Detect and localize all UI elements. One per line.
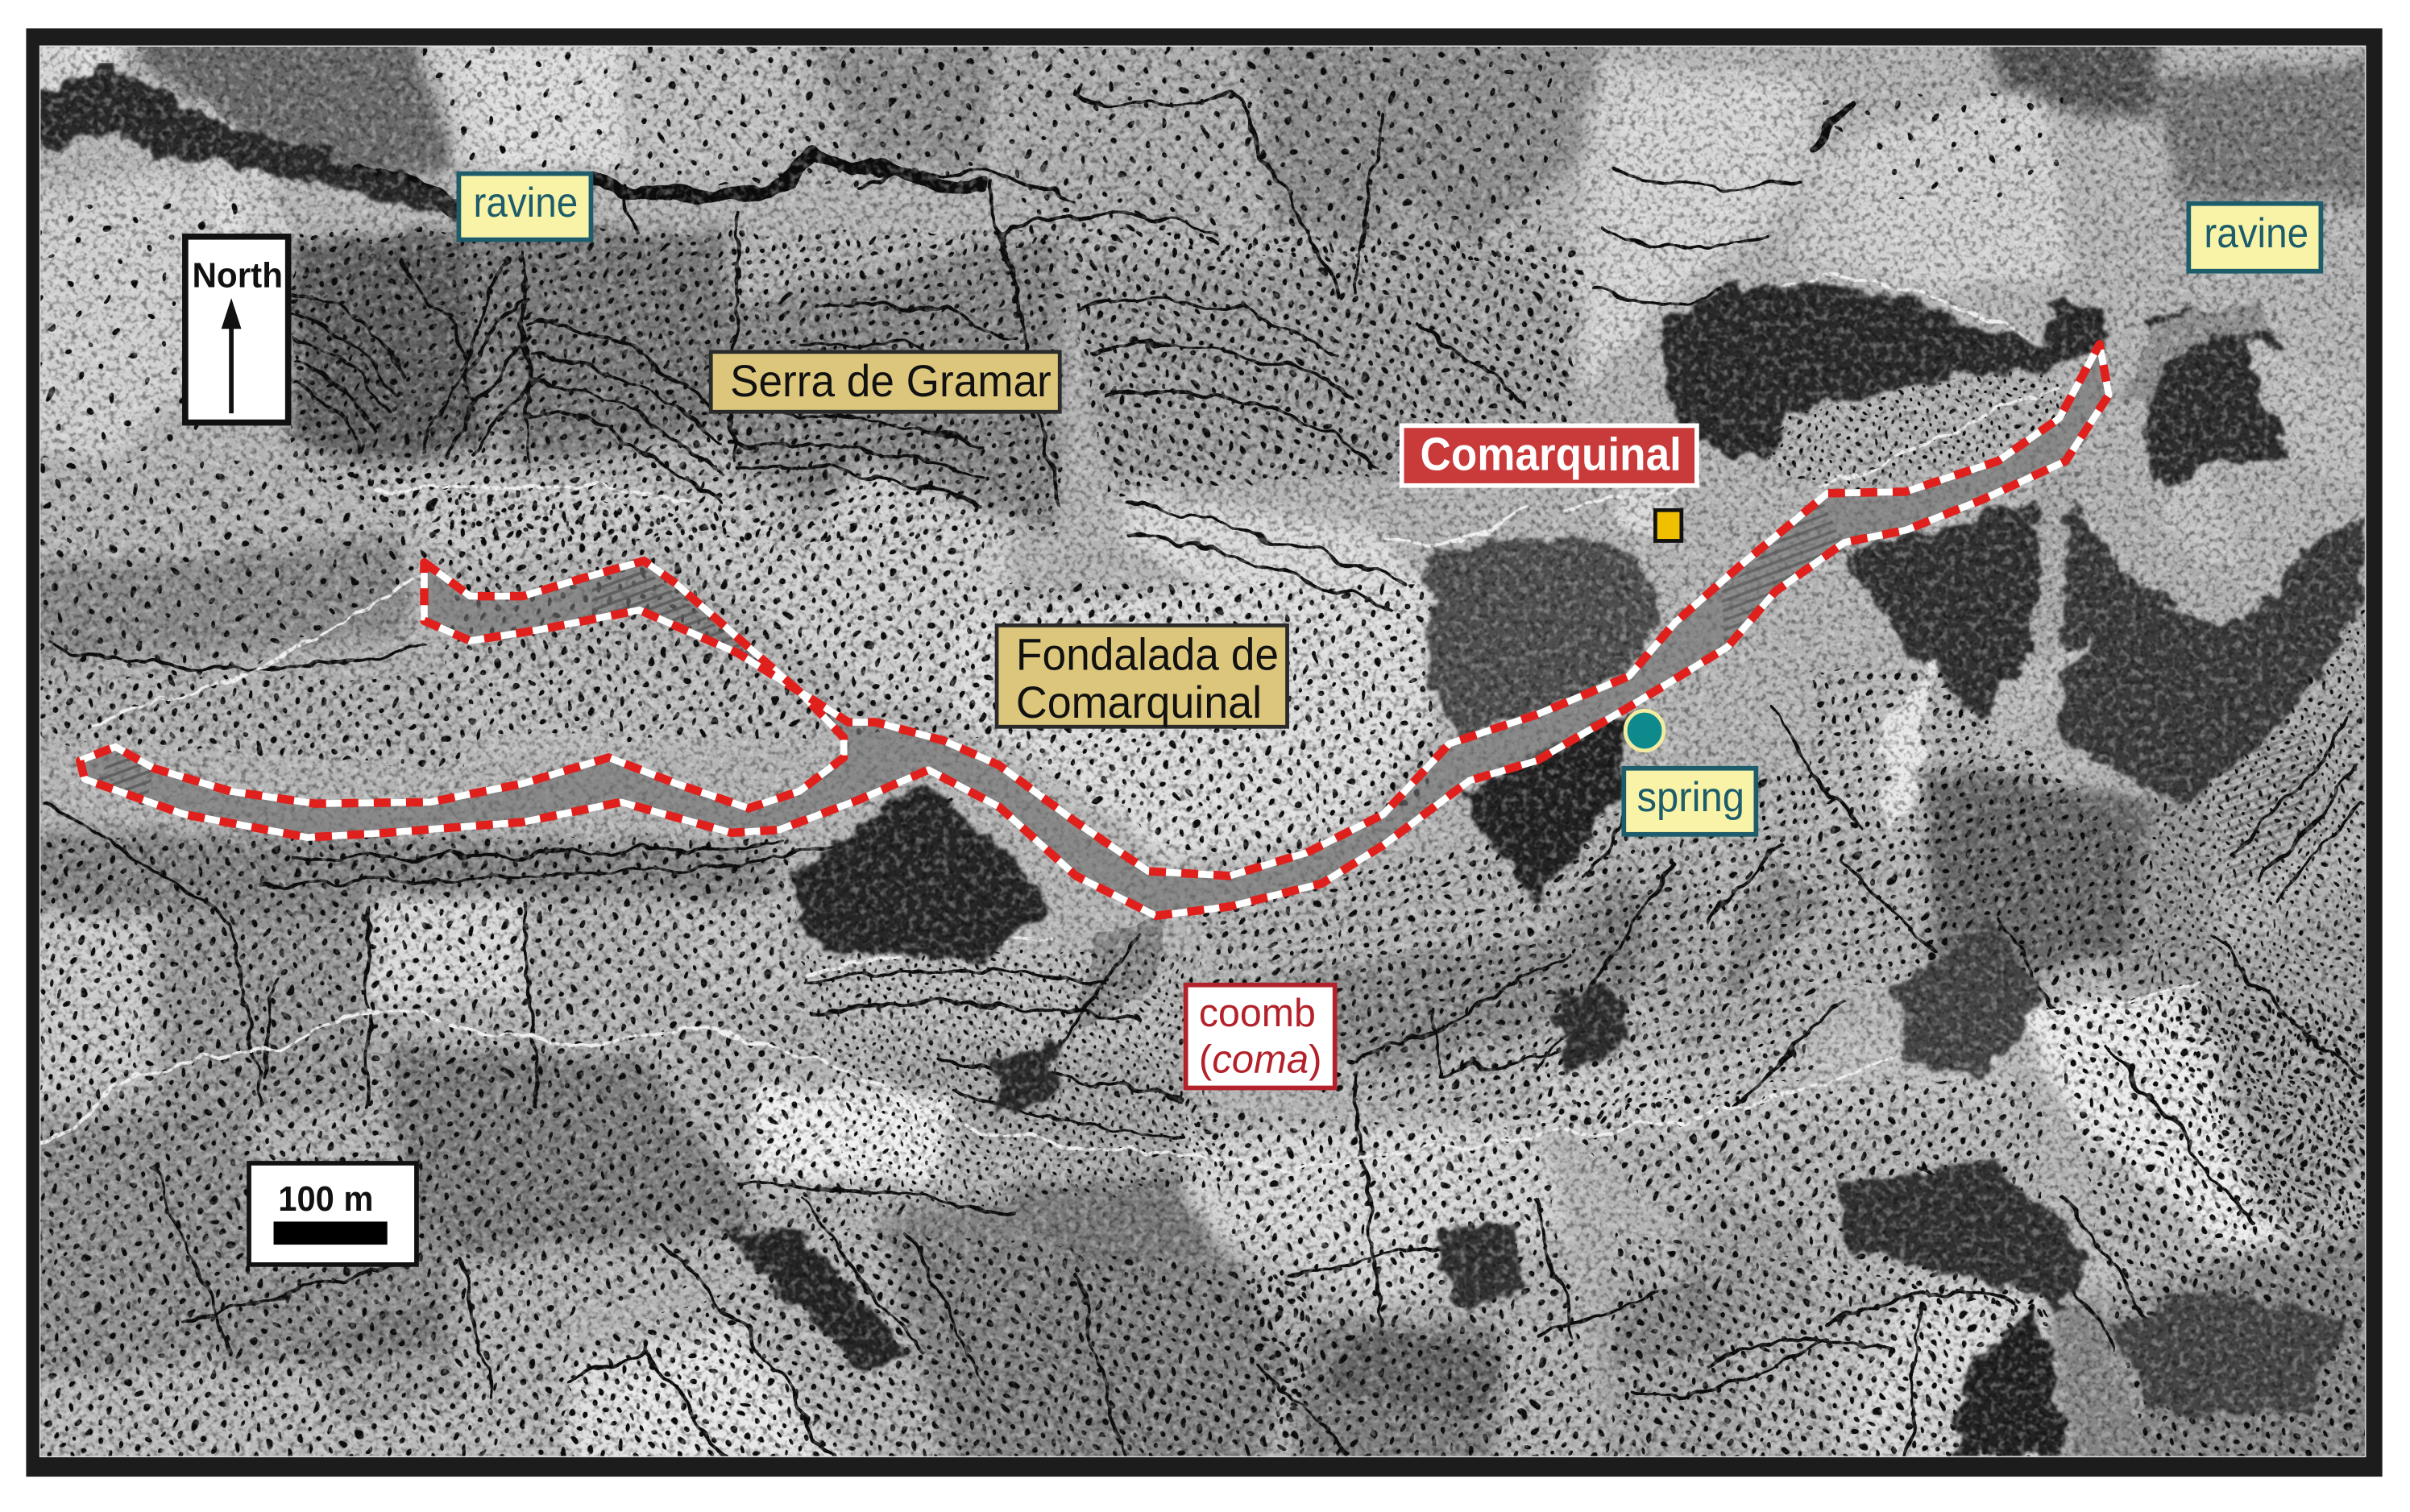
hatched terrace strips (92, 501, 2321, 906)
north arrow: North (192, 256, 283, 296)
label: coomb (coma): coomb (1199, 990, 1316, 1035)
scale bar: 100 m (278, 1179, 374, 1219)
label: coomb (coma): (coma) (1199, 1036, 1321, 1081)
label: coomb (coma) (1186, 985, 1335, 1088)
label: ravine west: ravine (474, 179, 578, 226)
icon: spring marker (1625, 710, 1664, 751)
pale tracks (40, 276, 2198, 1168)
label: ravine west (458, 174, 591, 240)
icon: yellow square settlement marker (1655, 510, 1682, 541)
woodland clearings (1614, 300, 2366, 830)
label: Comarquinal: Comarquinal (1421, 429, 1682, 481)
study corridor fill (80, 344, 2109, 916)
study corridor dashed boundary (80, 344, 2109, 916)
label: ravine east (2188, 204, 2321, 271)
scale bar (249, 1163, 417, 1265)
label: Serra de Gramar: Serra de Gramar (730, 356, 1052, 406)
label: spring: spring (1637, 773, 1744, 820)
label: Fondalada de Comarquinal (997, 625, 1288, 727)
north arrow (185, 237, 288, 423)
label: Fondalada de Comarquinal: Comarquinal (1016, 677, 1262, 727)
label: spring (1624, 768, 1756, 835)
label: ravine east: ravine (2204, 209, 2308, 256)
label: Fondalada de Comarquinal: Fondalada de (1016, 630, 1279, 680)
